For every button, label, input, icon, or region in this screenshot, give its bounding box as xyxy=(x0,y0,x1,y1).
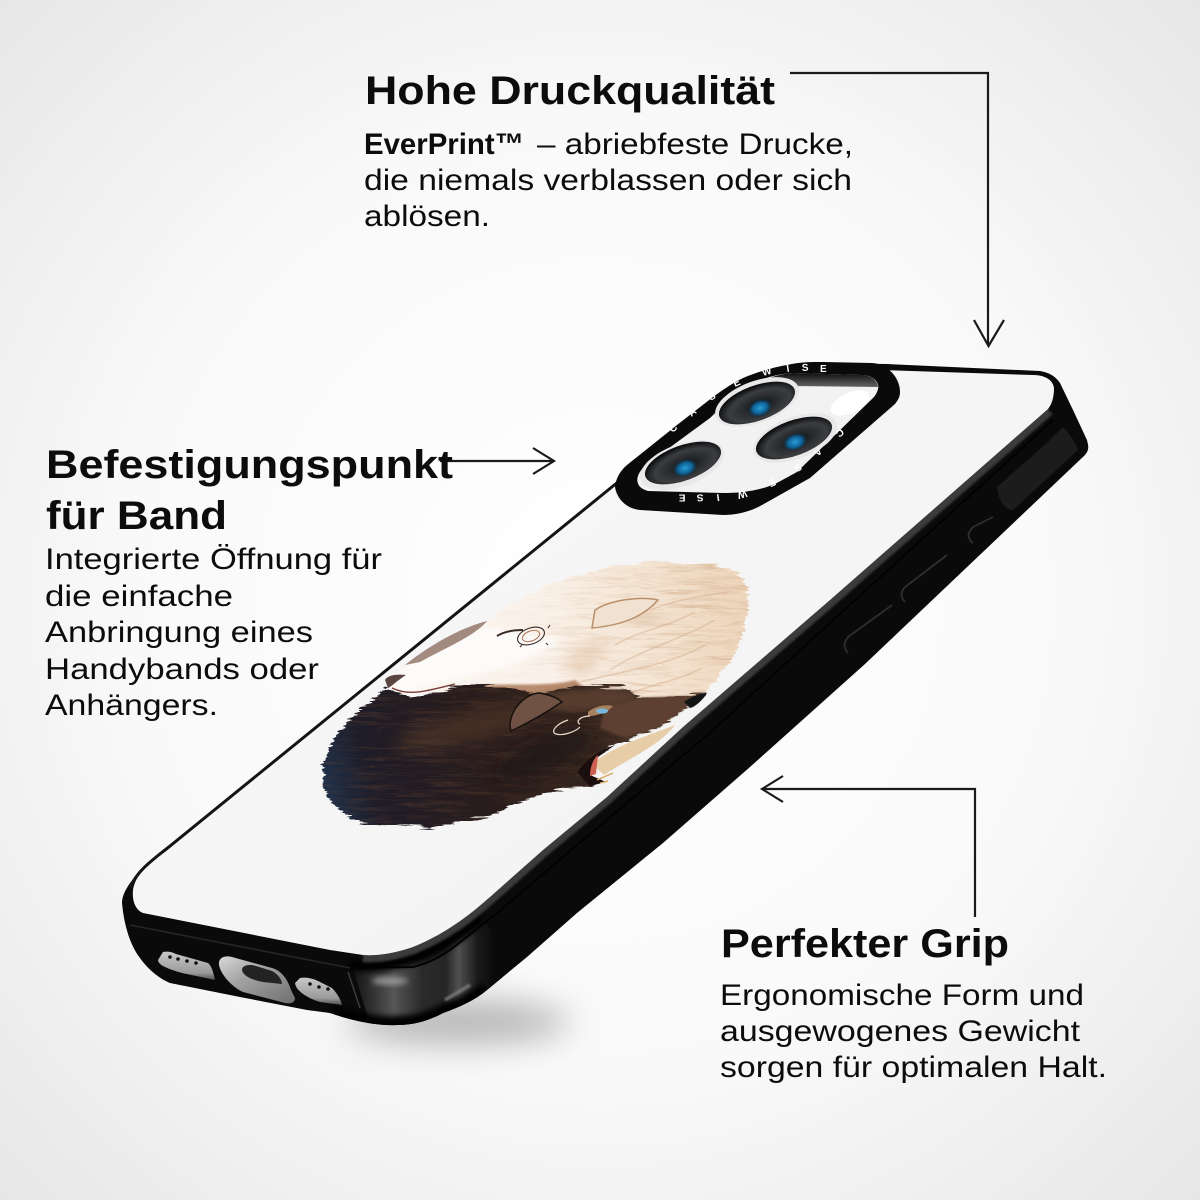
dark neck shade xyxy=(493,720,597,790)
warm fur patch xyxy=(392,697,538,759)
flash xyxy=(827,385,873,421)
camera window xyxy=(637,373,878,493)
open mouth xyxy=(577,745,615,786)
drop shadow under phone xyxy=(346,1000,570,1044)
mane behind head xyxy=(405,621,487,665)
chin shade xyxy=(470,680,590,697)
face highlight xyxy=(392,628,560,695)
description: Integrierte Öffnung für xyxy=(45,543,382,576)
fringe under jaw xyxy=(592,725,675,775)
heading: Befestigungspunkt xyxy=(46,443,453,487)
phone case xyxy=(122,363,1088,1030)
side buttons xyxy=(844,517,993,653)
charging port xyxy=(219,956,295,1003)
text block: grip xyxy=(720,922,1107,1084)
snout xyxy=(600,696,690,738)
description: Anbringung eines xyxy=(45,616,313,649)
lens: left xyxy=(633,430,731,500)
description: die niemals verblassen oder sich xyxy=(364,164,852,197)
description xyxy=(45,543,382,722)
tongue xyxy=(590,755,598,776)
ear xyxy=(510,693,562,731)
description: Anhängers. xyxy=(45,689,218,722)
white wolf xyxy=(385,560,750,775)
nose xyxy=(385,675,406,688)
side flap xyxy=(997,427,1078,510)
description: – abriebfeste Drucke, xyxy=(537,128,853,161)
description: ablösen. xyxy=(364,200,490,233)
dark wolf xyxy=(320,684,707,830)
fur flow strokes xyxy=(580,592,730,695)
ring lettering bottom: CASEWISE xyxy=(678,426,846,503)
camera ring xyxy=(615,362,900,515)
ring lettering top: CASEWISE xyxy=(667,363,827,435)
speaker holes xyxy=(168,955,330,991)
charging port opening xyxy=(242,965,282,984)
description: Handybands oder xyxy=(45,653,319,686)
cheek shade xyxy=(570,636,610,678)
right speaker xyxy=(295,978,342,1005)
left edge rim xyxy=(130,482,618,888)
heading xyxy=(46,443,453,538)
bottom groove xyxy=(130,925,350,968)
lens: right xyxy=(746,403,844,473)
teeth xyxy=(597,773,613,783)
lighter head fur xyxy=(525,687,635,713)
arrow: grip xyxy=(762,776,975,917)
arrow: print quality xyxy=(790,73,1004,346)
lens: top xyxy=(708,367,806,437)
left speaker xyxy=(158,952,215,980)
heading: Perfekter Grip xyxy=(721,922,1009,966)
description: sorgen für optimalen Halt. xyxy=(720,1051,1107,1084)
corner sheen xyxy=(330,918,505,1030)
arrow: lanyard point xyxy=(440,448,554,474)
bumper groove xyxy=(350,420,1053,968)
description xyxy=(364,128,853,233)
corner seam xyxy=(348,972,360,1008)
eye and marking xyxy=(554,705,613,735)
white wolf fur xyxy=(444,560,750,698)
back plate xyxy=(133,370,1054,955)
ear xyxy=(592,598,658,628)
bottom ports xyxy=(158,952,342,1005)
text block: print quality xyxy=(364,69,853,233)
plate edge strip xyxy=(363,409,1048,955)
text block: lanyard point xyxy=(45,443,453,722)
camera module xyxy=(615,362,900,515)
description: EverPrint™ xyxy=(364,128,524,161)
description: ausgewogenes Gewicht xyxy=(720,1015,1081,1048)
dark wolf fur xyxy=(320,684,707,830)
eye and marking xyxy=(497,624,550,648)
heading: Hohe Druckqualität xyxy=(365,69,775,113)
description: die einfache xyxy=(45,580,233,613)
description: Ergonomische Form und xyxy=(720,979,1084,1012)
window inner wall xyxy=(760,373,878,387)
case body xyxy=(122,363,1088,1025)
mouth line xyxy=(392,684,455,692)
description xyxy=(720,979,1107,1084)
artwork: yin yang wolves xyxy=(320,560,750,830)
nose xyxy=(684,693,707,708)
heading: für Band xyxy=(46,494,227,538)
